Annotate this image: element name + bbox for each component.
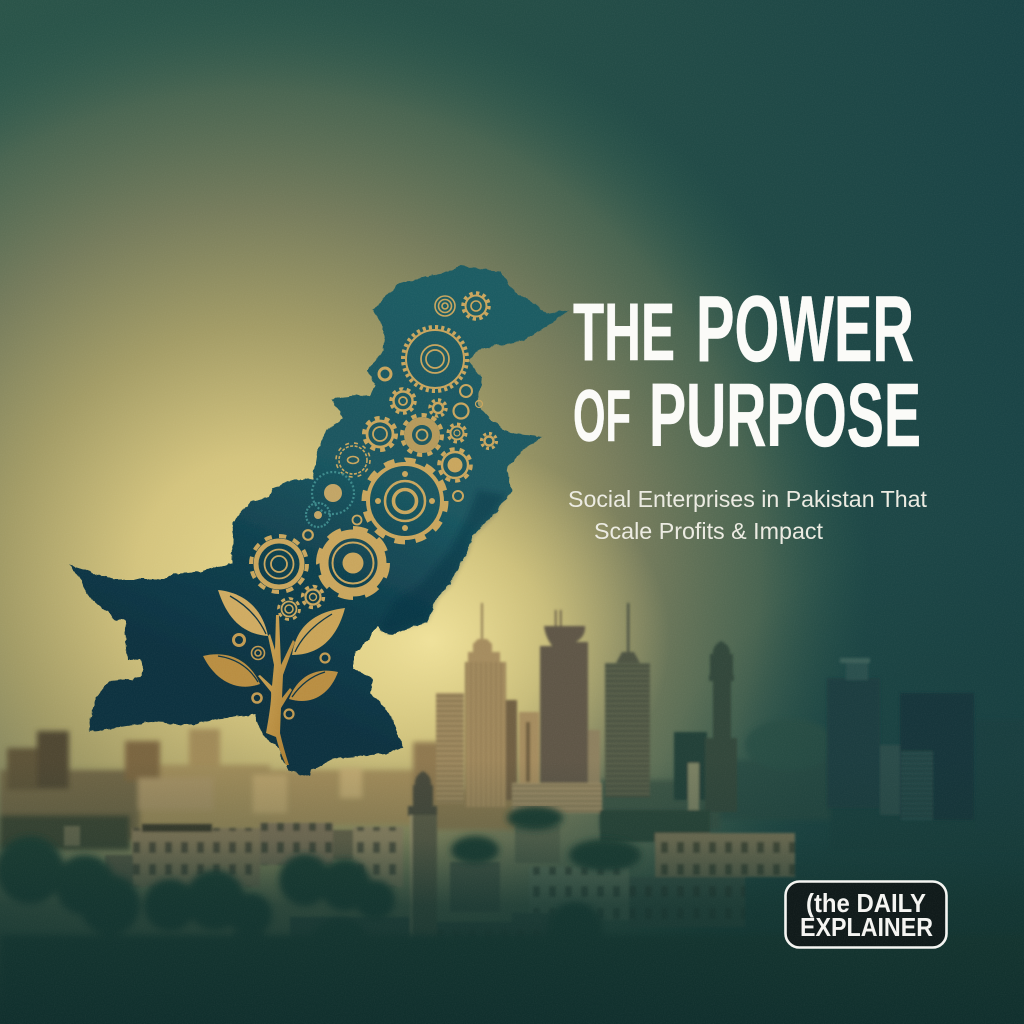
skyline: mid-ground buildings (64, 783, 795, 953)
gear 24 (302, 586, 324, 608)
gear 3 (403, 327, 467, 391)
map shading: darker southeastern band (380, 490, 505, 632)
gear 1 (435, 296, 455, 316)
gear 17 (364, 460, 446, 542)
tower: dark right towers (827, 658, 974, 820)
gear 15 (336, 443, 370, 477)
gear 7 (460, 385, 472, 397)
gear 25 (278, 598, 300, 620)
gear 13 (482, 434, 496, 448)
title: The Power of Purpose (573, 276, 921, 466)
leaf: upper left (218, 590, 268, 636)
gear 20 (352, 516, 362, 524)
gear 23 (320, 530, 386, 596)
skyline: towers and minarets (64, 603, 974, 985)
tower: striped office block (588, 603, 650, 797)
gear 19: teal (306, 503, 330, 527)
gear 6 (430, 400, 446, 416)
gear 16 (453, 491, 463, 501)
subtitle: Social Enterprises in Pakistan That (568, 486, 928, 512)
leaf midribs (218, 596, 332, 697)
skyline: hazy distant city (0, 719, 1024, 850)
logo badge: the Daily Explainer: (the DAILY (806, 888, 926, 918)
gear 21 (303, 530, 313, 540)
icon: growing plant (203, 590, 345, 765)
title: The Power of Purpose: OF (573, 376, 631, 457)
map: Pakistan silhouette (69, 266, 570, 777)
gear 18: teal (312, 472, 354, 514)
logo badge: the Daily Explainer: EXPLAINER (800, 912, 933, 942)
leaf: right (289, 671, 338, 701)
gear 5 (391, 389, 415, 413)
gear 10 (364, 418, 396, 450)
gears: cluster of gold cogs (251, 293, 496, 620)
tower: flared top (519, 610, 588, 790)
gear 2 (463, 293, 489, 319)
subtitle: Scale Profits & Impact (594, 518, 824, 544)
ground haze darkening toward the bottom (0, 760, 1024, 1024)
gear 9 (476, 400, 482, 408)
gear 22 (251, 536, 307, 592)
rings around the plant (234, 634, 330, 718)
gear 8 (454, 404, 468, 418)
gear 4 (379, 368, 391, 380)
gear 14 (439, 449, 471, 481)
leaf: left (203, 654, 260, 687)
subtitle (568, 486, 928, 544)
stem (258, 615, 295, 765)
title: The Power of Purpose: THE (573, 287, 675, 378)
minaret: right (674, 641, 737, 813)
minaret: left foreground (408, 771, 437, 941)
gear 12 (448, 424, 466, 442)
tower: tall stepped skyscraper (436, 603, 517, 807)
logo badge: the Daily Explainer (786, 882, 946, 948)
gear 11 (402, 415, 442, 455)
trees: foreground foliage (0, 806, 1024, 1024)
leaf: upper right (292, 608, 345, 655)
buildings: low foreground strip (180, 917, 552, 985)
